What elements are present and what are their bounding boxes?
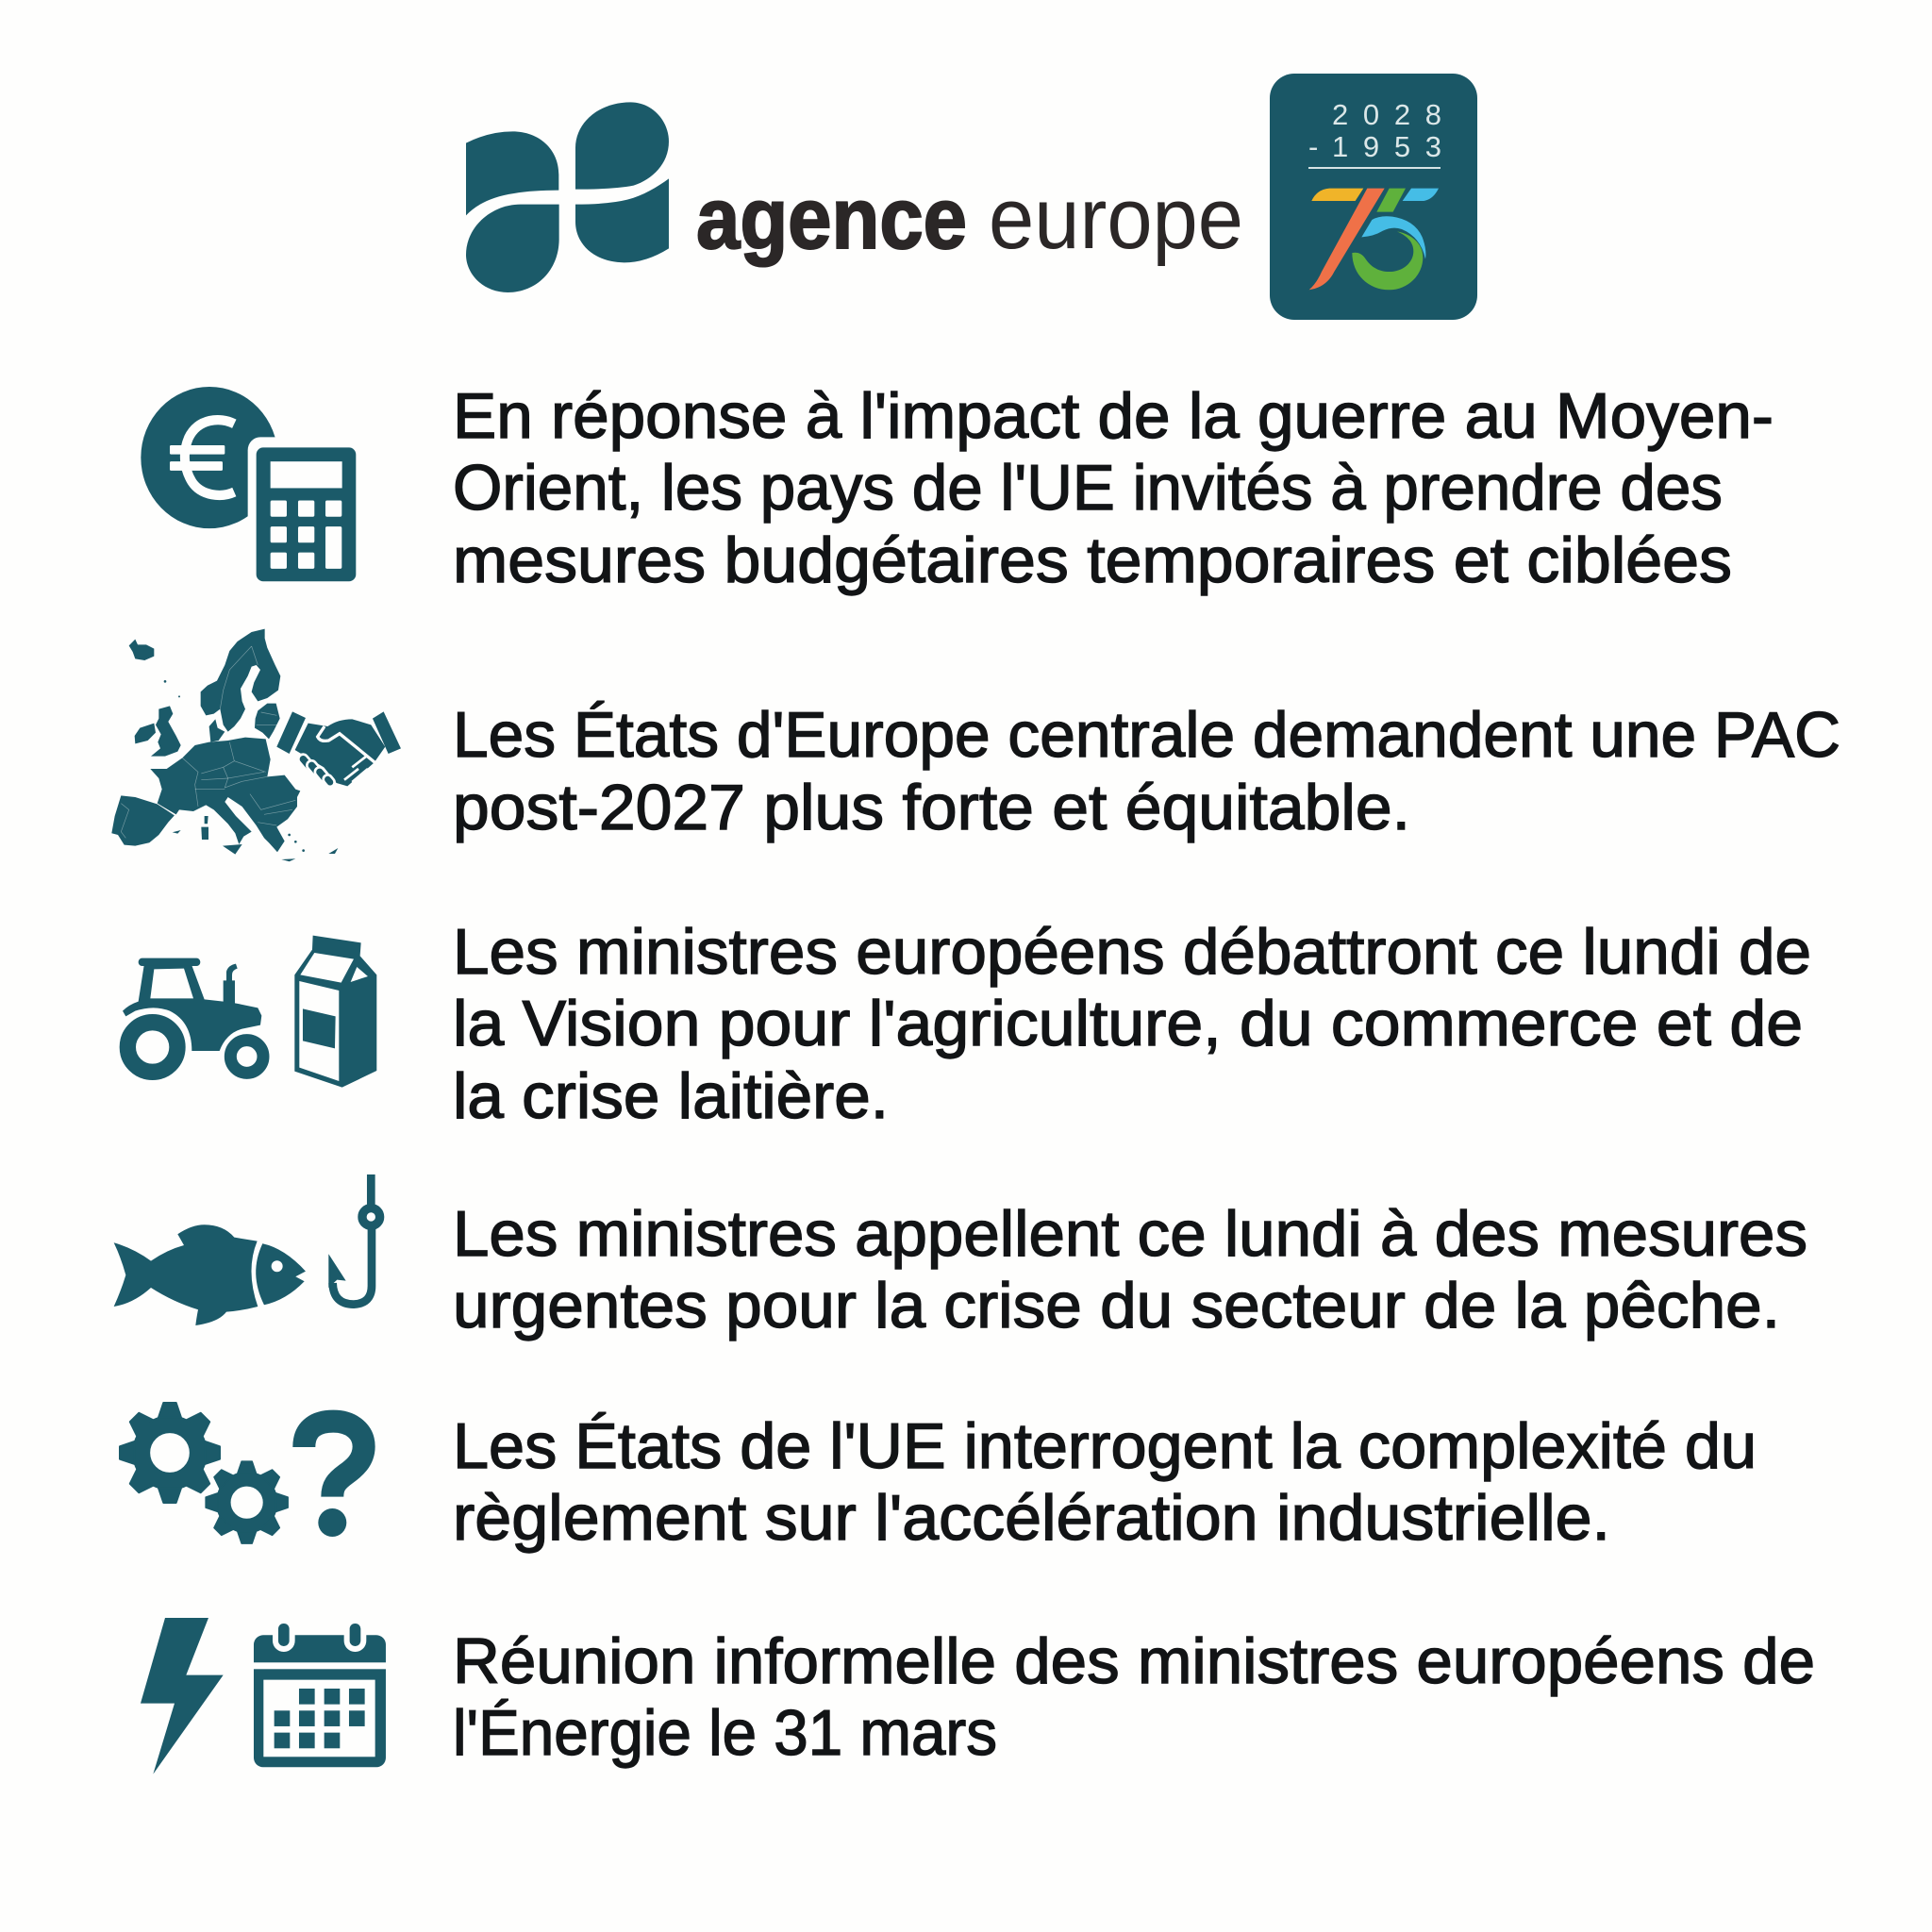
handshake bbox=[276, 711, 401, 789]
lightning bolt bbox=[141, 1618, 224, 1774]
text: PAC post-2027 bbox=[453, 699, 1840, 843]
icon: euro and calculator bbox=[141, 387, 365, 592]
europe map bbox=[111, 629, 338, 861]
text: energy ministers meeting bbox=[453, 1625, 1815, 1769]
text: energy ministers meeting: l'Énergie le 31 mars bbox=[453, 1697, 997, 1769]
icon: europe map and handshake bbox=[111, 629, 401, 861]
text: budget measures: Orient, les pays de l'UE invités à prendre des bbox=[453, 452, 1723, 524]
large gear bbox=[120, 1403, 220, 1503]
logo mark bbox=[466, 102, 669, 292]
badge years bbox=[1308, 98, 1441, 163]
text: agriculture ministers: Les ministres européens débattront ce lundi de bbox=[453, 916, 1811, 988]
hook bbox=[328, 1174, 380, 1305]
wordmark: agence bbox=[696, 171, 967, 267]
wordmark: europe bbox=[989, 171, 1243, 267]
text: PAC post-2027: post-2027 plus forte et équitable. bbox=[453, 772, 1410, 843]
logo: agence europe bbox=[466, 102, 1243, 292]
badge years: - bbox=[1308, 130, 1318, 163]
badge: 75 years bbox=[1270, 74, 1477, 320]
badge years: 2028 bbox=[1332, 98, 1441, 131]
text: fishing crisis: Les ministres appellent ce lundi à des mesures bbox=[453, 1198, 1807, 1270]
text: industrial acceleration: Les États de l'UE interrogent la complexité du bbox=[453, 1410, 1757, 1482]
calendar bbox=[252, 1621, 388, 1767]
text: fishing crisis bbox=[453, 1198, 1807, 1341]
text: budget measures: En réponse à l'impact de la guerre au Moyen- bbox=[453, 380, 1774, 452]
text: industrial acceleration: règlement sur l'accélération industrielle. bbox=[453, 1482, 1610, 1554]
text: PAC post-2027: Les États d'Europe centrale demandent une PAC bbox=[453, 699, 1840, 771]
text: industrial acceleration bbox=[453, 1410, 1757, 1554]
text: budget measures: mesures budgétaires temporaires et ciblées bbox=[453, 525, 1732, 596]
tractor bbox=[123, 958, 263, 1073]
text: agriculture ministers bbox=[453, 916, 1811, 1132]
badge 75 emblem bbox=[1309, 189, 1439, 290]
small gear bbox=[206, 1461, 288, 1543]
icon: tractor and milk carton bbox=[123, 936, 376, 1088]
text: budget measures bbox=[453, 380, 1774, 596]
question mark bbox=[304, 1422, 364, 1537]
fish bbox=[114, 1224, 306, 1325]
text: agriculture ministers: la Vision pour l'agriculture, du commerce et de bbox=[453, 988, 1803, 1059]
milk carton bbox=[294, 936, 376, 1088]
icon: lightning and calendar bbox=[141, 1618, 388, 1774]
icon: gears and question mark bbox=[120, 1403, 364, 1543]
text: energy ministers meeting: Réunion informelle des ministres européens de bbox=[453, 1625, 1815, 1697]
icon: fish and hook bbox=[114, 1174, 380, 1325]
badge years: 1953 bbox=[1332, 130, 1441, 163]
text: agriculture ministers: la crise laitière. bbox=[453, 1060, 889, 1132]
text: fishing crisis: urgentes pour la crise du secteur de la pêche. bbox=[453, 1270, 1780, 1341]
